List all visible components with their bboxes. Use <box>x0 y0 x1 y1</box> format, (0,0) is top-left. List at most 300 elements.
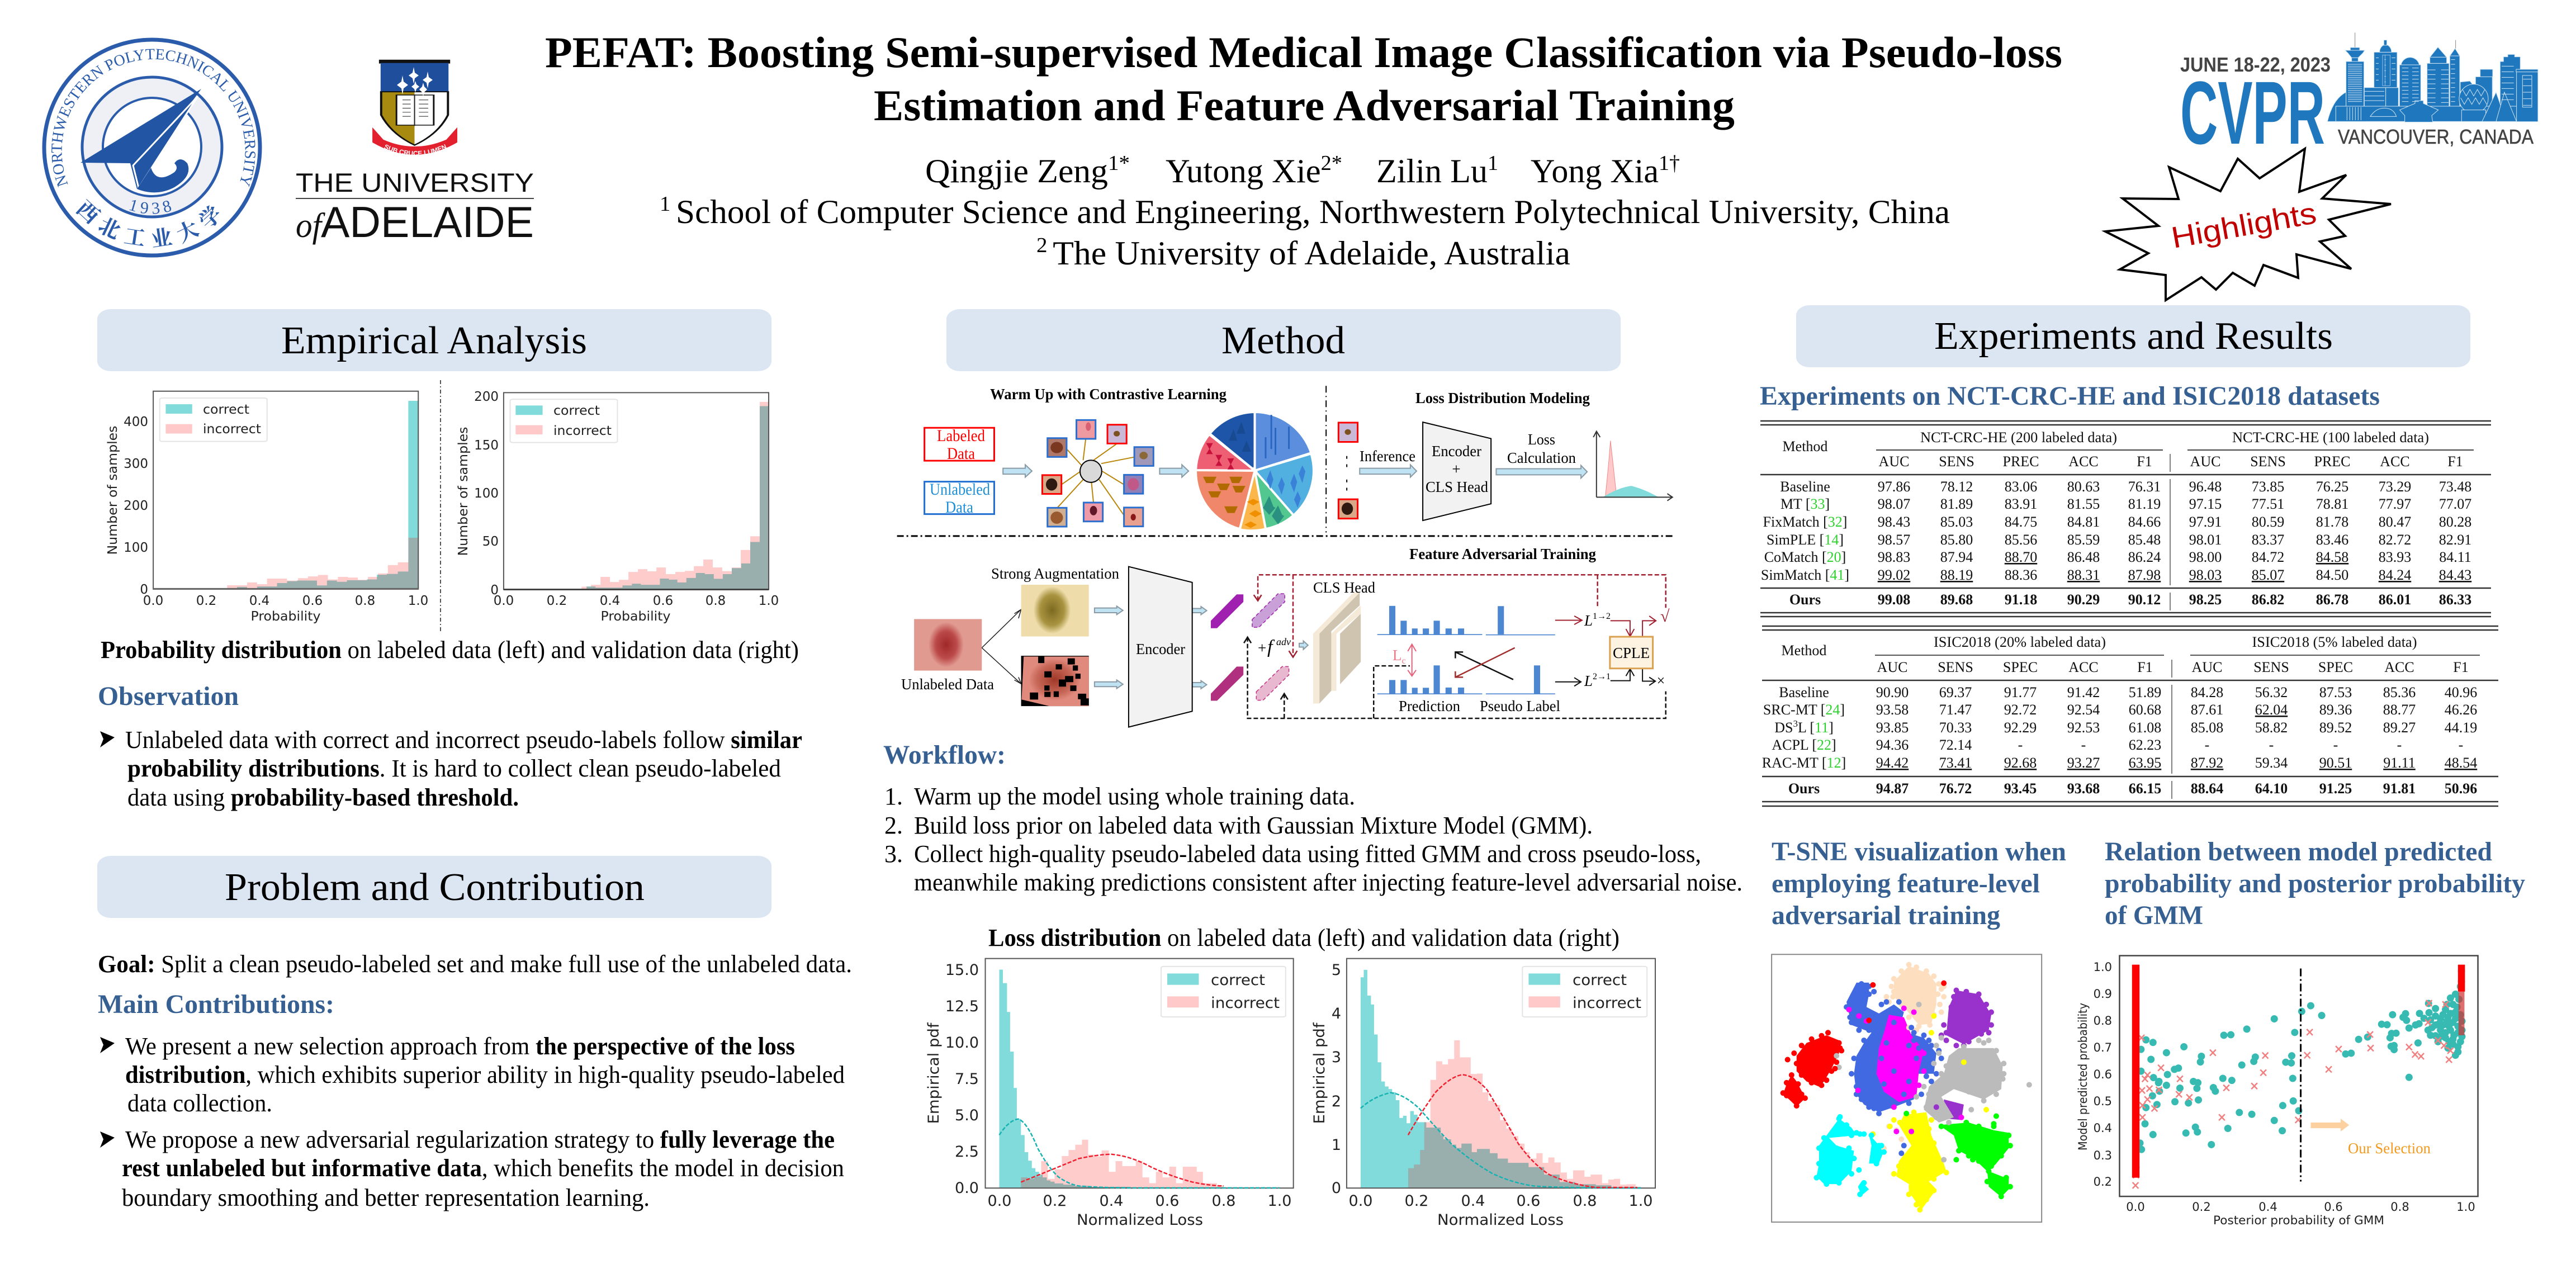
caption: probability distribution: Probability distribution on labeled data (left) and validation data (right) <box>101 636 799 664</box>
chart: loss distribution on labeled data: 7.5 <box>955 1071 979 1088</box>
table: NCT-CRC-HE results: 99.08 <box>1878 591 1910 608</box>
chart: loss distribution on labeled data: Normalized Loss <box>1077 1211 1203 1229</box>
table: ISIC2018 results: ISIC2018 (5% labeled data) <box>2252 634 2417 650</box>
logo: University of Adelaide: ADELAIDE <box>321 197 534 247</box>
chart: loss distribution on labeled data: 0.4 <box>1100 1192 1123 1210</box>
table: NCT-CRC-HE results: ACC <box>2068 453 2099 470</box>
table: NCT-CRC-HE results: 83.06 <box>2005 479 2037 495</box>
table: NCT-CRC-HE results: 86.24 <box>2128 549 2161 565</box>
table: ISIC2018 results: - <box>2269 737 2274 753</box>
table: NCT-CRC-HE results: F1 <box>2447 453 2463 470</box>
chart: probability distribution on labeled data <box>106 391 428 624</box>
authors and affiliations: Zilin Lu <box>1376 153 1487 190</box>
table: NCT-CRC-HE results: 83.37 <box>2252 532 2284 548</box>
method diagram labels: Loss Distribution Modeling <box>1415 390 1590 406</box>
prediction and pseudo-label bars <box>1377 606 1555 694</box>
mini loss distribution <box>1593 432 1673 501</box>
chart: probability distribution on validation data: Probability <box>600 609 671 624</box>
authors and affiliations: 2 <box>1036 234 1053 257</box>
chart: probability distribution on validation data: 0 <box>490 583 499 598</box>
table: ISIC2018 results: 87.53 <box>2319 684 2352 700</box>
table: NCT-CRC-HE results: 87.94 <box>1940 549 1973 565</box>
heading: T-SNE visualization: T-SNE visualization when <box>1772 837 2066 866</box>
heading: Experiments and Results: Experiments and Results <box>1934 315 2333 358</box>
table: ISIC2018 results: 93.45 <box>2004 780 2037 797</box>
table: ISIC2018 results: 93.68 <box>2067 780 2100 797</box>
table: NCT-CRC-HE results: 81.55 <box>2067 496 2100 512</box>
table: NCT-CRC-HE results: 82.91 <box>2439 532 2471 548</box>
table: NCT-CRC-HE results: 96.48 <box>2189 479 2222 495</box>
chart: model probability vs GMM posterior scatter <box>2076 956 2478 1227</box>
chart: model probability vs GMM posterior scatter: Posterior probability of GMM <box>2213 1214 2384 1227</box>
table: ISIC2018 results: 93.58 <box>1876 702 1909 718</box>
text block: workflow steps: 3. <box>884 840 903 868</box>
method diagram labels: + <box>1452 461 1461 477</box>
chart: loss distribution on labeled data: Empirical pdf <box>925 1022 943 1124</box>
heading: Empirical Analysis: Empirical Analysis <box>281 319 587 362</box>
table: NCT-CRC-HE results: 98.01 <box>2189 532 2222 548</box>
table: NCT-CRC-HE results: 77.97 <box>2379 496 2411 512</box>
chart: model probability vs GMM posterior scatter: 0.2 <box>2192 1200 2211 1214</box>
table: NCT-CRC-HE results: 81.89 <box>1940 496 1973 512</box>
dashed adversarial paths <box>1244 575 1666 718</box>
chart: probability distribution on labeled data: 0.0 <box>143 594 163 608</box>
heading: Main Contributions: Main Contributions: <box>98 989 334 1019</box>
logo: CVPR 2023 Vancouver: JUNE 18-22, 2023 <box>2180 53 2331 76</box>
chart: probability distribution on validation data: incorrect <box>553 424 612 438</box>
table: ISIC2018 results: SRC-MT [24] <box>1763 702 1845 718</box>
table: ISIC2018 results: 40.96 <box>2445 684 2477 700</box>
table: ISIC2018 results: 59.34 <box>2255 755 2288 771</box>
table: NCT-CRC-HE results: 88.36 <box>2005 567 2037 583</box>
chart: loss distribution on labeled data: 12.5 <box>945 998 979 1015</box>
table: NCT-CRC-HE results: 84.72 <box>2252 549 2284 565</box>
table: NCT-CRC-HE results: 73.29 <box>2379 479 2411 495</box>
table: ISIC2018 results: 56.32 <box>2255 684 2288 700</box>
heading: Experiments and Results <box>1796 305 2470 367</box>
table: NCT-CRC-HE results: Method <box>1783 438 1827 454</box>
heading: Empirical Analysis <box>97 309 771 371</box>
chart: model probability vs GMM posterior scatter: 0.8 <box>2390 1200 2409 1214</box>
chart: loss distribution on validation data <box>1311 959 1655 1229</box>
table: NCT-CRC-HE results: 98.57 <box>1878 532 1910 548</box>
chart: probability distribution on labeled data: 100 <box>124 541 148 555</box>
chart: loss distribution on validation data: 3 <box>1332 1049 1341 1066</box>
table: NCT-CRC-HE results: 97.15 <box>2189 496 2222 512</box>
chart: loss distribution on labeled data: 0.2 <box>1043 1192 1067 1210</box>
table: ISIC2018 results: 92.53 <box>2067 719 2100 736</box>
table: NCT-CRC-HE results: 91.18 <box>2005 591 2037 608</box>
method diagram labels: Feature Adversarial Training <box>1409 546 1596 562</box>
table: ISIC2018 results: ACPL [22] <box>1772 737 1836 753</box>
authors and affiliations: School of Computer Science and Engineering, Northwestern Polytechnical University, China <box>676 193 1950 230</box>
table: NCT-CRC-HE results <box>1760 421 2491 617</box>
table: NCT-CRC-HE results: NCT-CRC-HE (200 labeled data) <box>1920 429 2117 446</box>
table: NCT-CRC-HE results: 89.68 <box>1940 591 1973 608</box>
table: NCT-CRC-HE results: 98.07 <box>1878 496 1910 512</box>
chart: loss distribution on validation data: 0.6 <box>1517 1192 1540 1210</box>
text block: contributions: We propose a new adversarial regularization strategy to fully leverage the <box>125 1126 835 1153</box>
strong augmentation images <box>1021 585 1089 706</box>
table: ISIC2018 results: - <box>2018 737 2023 753</box>
method diagram labels: Strong Augmentation <box>991 565 1119 582</box>
chart: loss distribution on validation data: 0 <box>1332 1180 1341 1197</box>
heading: T-SNE visualization: adversarial training <box>1772 901 2000 930</box>
table: NCT-CRC-HE results: AUC <box>2190 453 2220 470</box>
heading: relation between probabilities: Relation between model predicted <box>2105 837 2492 866</box>
text block: workflow steps: 1. <box>884 783 903 810</box>
table: NCT-CRC-HE results: 83.93 <box>2379 549 2411 565</box>
table: NCT-CRC-HE results: 80.47 <box>2379 514 2411 530</box>
chart: probability distribution on labeled data: Probability <box>250 609 321 624</box>
method diagram labels: Prediction <box>1399 698 1460 714</box>
text block: observation: data using probability-based threshold. <box>127 784 519 811</box>
table: NCT-CRC-HE results: 97.91 <box>2189 514 2222 530</box>
chart: model probability vs GMM posterior scatter: Our Selection <box>2348 1140 2431 1157</box>
table: NCT-CRC-HE results: MT [33] <box>1781 496 1830 512</box>
table: NCT-CRC-HE results: 85.80 <box>1940 532 1973 548</box>
table: NCT-CRC-HE results: 84.58 <box>2316 549 2348 565</box>
heading: relation between probabilities <box>2105 837 2525 930</box>
table: NCT-CRC-HE results: 99.02 <box>1878 567 1910 583</box>
table: ISIC2018 results: 72.14 <box>1939 737 1972 753</box>
chart: loss distribution on validation data: Empirical pdf <box>1311 1022 1328 1124</box>
chart: loss distribution on validation data: correct <box>1573 972 1627 989</box>
chart: probability distribution on validation data: correct <box>553 404 600 418</box>
method diagram labels: CLS Head <box>1426 479 1488 495</box>
heading: experiments on datasets: Experiments on NCT-CRC-HE and ISIC2018 datasets <box>1760 381 2380 411</box>
table: NCT-CRC-HE results: 88.31 <box>2067 567 2100 583</box>
method diagram labels: Loss <box>1528 431 1555 448</box>
table: NCT-CRC-HE results: 80.63 <box>2067 479 2100 495</box>
table: ISIC2018 results: 63.95 <box>2129 755 2161 771</box>
chart: probability distribution on labeled data: 0 <box>140 583 148 597</box>
method diagram labels: Warm Up with Contrastive Learning <box>990 386 1227 402</box>
chart: loss distribution on labeled data: 2.5 <box>955 1143 979 1161</box>
table: ISIC2018 results: F1 <box>2137 659 2153 675</box>
encoder and CLS head trapezoid <box>1423 422 1491 520</box>
chart: loss distribution on validation data: incorrect <box>1573 995 1641 1012</box>
chart: model probability vs GMM posterior scatter: 1.0 <box>2456 1200 2475 1214</box>
logo: CVPR 2023 Vancouver: VANCOUVER, CANADA <box>2338 125 2534 148</box>
method diagram labels: L <box>1584 673 1593 689</box>
text block: workflow steps: meanwhile making predictions consistent after injecting feature-level adversarial noise. <box>914 869 1742 896</box>
chart: model probability vs GMM posterior scatter: Model predicted probability <box>2076 1003 2090 1150</box>
chart: probability distribution on labeled data: 0.4 <box>249 594 269 608</box>
callout: Highlights starburst <box>2105 149 2391 300</box>
sample thumbnails <box>1042 420 1358 527</box>
table: ISIC2018 results: 89.27 <box>2383 719 2416 736</box>
table: ISIC2018 results: - <box>2459 737 2463 753</box>
table: ISIC2018 results: 92.68 <box>2004 755 2037 771</box>
table: NCT-CRC-HE results: 85.03 <box>1940 514 1973 530</box>
table: NCT-CRC-HE results: 77.07 <box>2439 496 2471 512</box>
feature blocks <box>1211 594 1289 700</box>
table: ISIC2018 results: 76.72 <box>1939 780 1972 797</box>
table: ISIC2018 results: 3 <box>1793 718 1798 729</box>
chart: loss distribution on validation data: 0.8 <box>1573 1192 1597 1210</box>
table: ISIC2018 results: 92.72 <box>2004 702 2037 718</box>
table: NCT-CRC-HE results: 80.59 <box>2252 514 2284 530</box>
table: NCT-CRC-HE results: SimPLE [14] <box>1767 532 1844 548</box>
chart: loss distribution on validation data: 0.0 <box>1349 1192 1372 1210</box>
chart: probability distribution on validation data: 1.0 <box>759 594 779 608</box>
table: NCT-CRC-HE results: 86.33 <box>2439 591 2471 608</box>
logo: Northwestern Polytechnical University seal: 1938 <box>129 200 171 214</box>
table: NCT-CRC-HE results: 80.28 <box>2439 514 2471 530</box>
text block: contributions: rest unlabeled but informative data, which benefits the model in decision <box>122 1154 844 1182</box>
chart: model probability vs GMM posterior scatter: 1.0 <box>2094 960 2112 974</box>
method diagram labels: Encoder <box>1136 641 1185 657</box>
chart: probability distribution on validation data: 0.2 <box>547 594 567 608</box>
table: NCT-CRC-HE results: NCT-CRC-HE (100 labeled data) <box>2232 429 2429 446</box>
text block: workflow steps: 2. <box>884 812 903 839</box>
chart: loss distribution on validation data: Normalized Loss <box>1437 1211 1564 1229</box>
table: ISIC2018 results: ACC <box>2384 659 2414 675</box>
table: ISIC2018 results: 93.85 <box>1876 719 1909 736</box>
table: ISIC2018 results: 93.27 <box>2067 755 2100 771</box>
table: ISIC2018 results: SENS <box>1938 659 1973 675</box>
table: ISIC2018 results: Method <box>1782 642 1826 659</box>
authors and affiliations: 1 <box>660 192 676 216</box>
method diagram labels: 2→1 <box>1593 672 1611 681</box>
heading: Method <box>946 309 1621 371</box>
table: ISIC2018 results: 66.15 <box>2129 780 2161 797</box>
chart: probability distribution on validation data: 0.8 <box>705 594 726 608</box>
method diagram labels: CLS Head <box>1313 579 1375 596</box>
chart: probability distribution on labeled data: 0.2 <box>196 594 216 608</box>
table: NCT-CRC-HE results: 98.25 <box>2189 591 2222 608</box>
table: ISIC2018 results: 58.82 <box>2255 719 2288 736</box>
table: ISIC2018 results: 91.11 <box>2383 755 2416 771</box>
table: ISIC2018 results: 89.52 <box>2319 719 2352 736</box>
table: ISIC2018 results: 92.54 <box>2067 702 2100 718</box>
chart: probability distribution on validation data: Number of samples <box>456 427 471 556</box>
chart: loss distribution on labeled data: correct <box>1211 972 1265 989</box>
text block: contributions: We present a new selection approach from the perspective of the loss <box>125 1033 795 1060</box>
table: NCT-CRC-HE results: 88.70 <box>2005 549 2037 565</box>
table: NCT-CRC-HE results: 78.81 <box>2316 496 2348 512</box>
table: NCT-CRC-HE results: 73.48 <box>2439 479 2471 495</box>
method diagram labels: Inference <box>1360 448 1415 465</box>
method diagram labels: Unlabeled <box>930 480 990 499</box>
table: ISIC2018 results: 91.81 <box>2383 780 2416 797</box>
table: ISIC2018 results: 48.54 <box>2445 755 2477 771</box>
table: NCT-CRC-HE results: 81.19 <box>2128 496 2161 512</box>
authors and affiliations <box>660 151 1950 272</box>
chart: loss distribution on labeled data: 0.8 <box>1212 1192 1235 1210</box>
table: NCT-CRC-HE results: F1 <box>2137 453 2152 470</box>
table: NCT-CRC-HE results: 85.59 <box>2067 532 2100 548</box>
chart: probability distribution on labeled data: incorrect <box>203 422 261 437</box>
chart: loss distribution on labeled data: 0.0 <box>988 1192 1011 1210</box>
table: NCT-CRC-HE results: 84.11 <box>2439 549 2471 565</box>
logo: Northwestern Polytechnical University seal <box>42 38 262 257</box>
table: NCT-CRC-HE results: 90.29 <box>2067 591 2100 608</box>
text block: workflow steps: Build loss prior on labeled data with Gaussian Mixture Model (GMM). <box>914 812 1593 839</box>
table: NCT-CRC-HE results: AUC <box>1879 453 1909 470</box>
table: ISIC2018 results: 62.04 <box>2255 702 2288 718</box>
table: NCT-CRC-HE results: 81.78 <box>2316 514 2348 530</box>
table: ISIC2018 results: SENS <box>2253 659 2289 675</box>
chart: model probability vs GMM posterior scatter: 0.0 <box>2126 1200 2145 1214</box>
heading: relation between probabilities: of GMM <box>2105 901 2203 930</box>
text block: goal: Goal: Split a clean pseudo-labeled set and make full use of the unlabeled data. <box>98 950 852 978</box>
table: ISIC2018 results: AUC <box>1877 659 1907 675</box>
table: NCT-CRC-HE results: 84.50 <box>2316 567 2348 583</box>
chart: model probability vs GMM posterior scatter: 0.2 <box>2094 1175 2112 1188</box>
logo: Northwestern Polytechnical University seal: NORTHWESTERN POLYTECHNICAL UNIVERSITY <box>51 49 255 188</box>
chart: probability distribution on labeled data: 200 <box>124 499 148 513</box>
table: NCT-CRC-HE results: CoMatch [20] <box>1764 549 1846 565</box>
chart: loss distribution on labeled data <box>925 959 1294 1229</box>
table: NCT-CRC-HE results: 98.03 <box>2189 567 2222 583</box>
callout: Highlights starburst: Highlights <box>2169 196 2319 255</box>
table: ISIC2018 results: 91.25 <box>2319 780 2352 797</box>
table: ISIC2018 results: 94.36 <box>1876 737 1909 753</box>
authors and affiliations: The University of Adelaide, Australia <box>1053 235 1570 272</box>
table: NCT-CRC-HE results: SimMatch [41] <box>1761 567 1849 583</box>
table: NCT-CRC-HE results: PREC <box>2314 453 2351 470</box>
authors and affiliations: Yong Xia <box>1531 153 1659 190</box>
chart: probability distribution on labeled data: 300 <box>124 457 148 471</box>
logo: University of Adelaide <box>296 59 534 247</box>
method diagram labels: adv <box>1276 636 1291 647</box>
logo: CVPR 2023 Vancouver: CVPR <box>2180 63 2325 163</box>
chart: probability distribution on validation data: 150 <box>474 438 499 453</box>
heading: Observation: Observation <box>98 681 239 711</box>
chart: loss distribution on labeled data: 0.6 <box>1156 1192 1179 1210</box>
table: NCT-CRC-HE results: 98.00 <box>2189 549 2222 565</box>
table: ISIC2018 results: 51.89 <box>2129 684 2161 700</box>
authors and affiliations: 1* <box>1108 151 1130 175</box>
table: ISIC2018 results: 69.37 <box>1939 684 1972 700</box>
table: NCT-CRC-HE results: 84.24 <box>2379 567 2411 583</box>
chart: model probability vs GMM posterior scatter: 0.6 <box>2094 1068 2112 1081</box>
caption: loss distribution: Loss distribution on labeled data (left) and validation data (right) <box>988 924 1620 951</box>
table: ISIC2018 results: 87.92 <box>2191 755 2223 771</box>
table: NCT-CRC-HE results: 77.51 <box>2252 496 2284 512</box>
title <box>545 28 2062 130</box>
title: Estimation and Feature Adversarial Training <box>874 81 1735 130</box>
title: PEFAT: Boosting Semi-supervised Medical Image Classification via Pseudo-loss <box>545 28 2062 77</box>
heading: T-SNE visualization: employing feature-level <box>1772 869 2040 898</box>
table: ISIC2018 results: L [ <box>1798 719 1815 736</box>
branch arrows <box>982 609 1021 684</box>
chart: probability distribution on labeled data: Number of samples <box>106 426 120 555</box>
arrows: light blue flow arrows <box>1003 465 1587 689</box>
panel: labeled and unlabeled data boxes <box>925 428 994 514</box>
table: ISIC2018 results: 90.51 <box>2319 755 2352 771</box>
table: NCT-CRC-HE results: ACC <box>2380 453 2410 470</box>
text block: observation <box>100 726 802 811</box>
table: NCT-CRC-HE results: 90.12 <box>2128 591 2161 608</box>
table: ISIC2018 results: 62.23 <box>2129 737 2161 753</box>
chart: probability distribution on labeled data: correct <box>203 402 249 417</box>
table: NCT-CRC-HE results: SENS <box>2250 453 2286 470</box>
chart: probability distribution on validation data <box>456 390 779 624</box>
table: ISIC2018 results: 84.28 <box>2191 684 2223 700</box>
table: ISIC2018 results: 71.47 <box>1939 702 1972 718</box>
table: ISIC2018 results: DS <box>1774 719 1793 736</box>
method diagram labels: Unlabeled Data <box>901 676 994 693</box>
method diagram labels: 1→2 <box>1593 612 1611 621</box>
diagram: PEFAT method pipeline <box>897 386 1674 727</box>
CLS head layers <box>1313 593 1361 703</box>
table: ISIC2018 results: 94.42 <box>1876 755 1909 771</box>
chart: probability distribution on validation data: 50 <box>482 534 499 549</box>
table: ISIC2018 results: 89.36 <box>2319 702 2352 718</box>
table: ISIC2018 results: - <box>2333 737 2338 753</box>
table: ISIC2018 results: 73.41 <box>1939 755 1972 771</box>
table: ISIC2018 results: 91.77 <box>2004 684 2037 700</box>
table: NCT-CRC-HE results: 98.43 <box>1878 514 1910 530</box>
table: NCT-CRC-HE results: 84.81 <box>2067 514 2100 530</box>
table: ISIC2018 results: SPEC <box>2003 659 2038 675</box>
table: ISIC2018 results: 50.96 <box>2445 780 2477 797</box>
chart: T-SNE scatter clusters <box>1772 954 2042 1222</box>
heading: Workflow: Workflow: <box>883 740 1006 770</box>
table: NCT-CRC-HE results: 88.19 <box>1940 567 1973 583</box>
authors and affiliations: Yutong Xie <box>1166 153 1319 190</box>
table: NCT-CRC-HE results: 85.48 <box>2128 532 2161 548</box>
heading: T-SNE visualization <box>1772 837 2066 930</box>
logo: University of Adelaide: SUB CRUCE LUMEN <box>384 144 446 155</box>
table: NCT-CRC-HE results: SENS <box>1939 453 1974 470</box>
chart: loss distribution on validation data: 0.2 <box>1405 1192 1428 1210</box>
contrastive lines to center node <box>1057 439 1134 515</box>
table: ISIC2018 results: 44.19 <box>2445 719 2477 736</box>
lesions in thumbnails <box>1046 423 1353 524</box>
chart: model probability vs GMM posterior scatter: 0.8 <box>2094 1014 2112 1027</box>
table: NCT-CRC-HE results: 73.85 <box>2252 479 2284 495</box>
section dividers <box>897 386 1674 536</box>
chart: probability distribution on labeled data: 0.8 <box>355 594 375 608</box>
method diagram labels: √ <box>1660 607 1670 626</box>
logo: Northwestern Polytechnical University seal: 西北工业大学 <box>75 199 219 248</box>
table: ISIC2018 results: 90.90 <box>1876 684 1909 700</box>
heading: relation between probabilities: probability and posterior probability <box>2105 869 2525 898</box>
chart: loss distribution on validation data: 1.0 <box>1629 1192 1652 1210</box>
table: ISIC2018 results: - <box>2081 737 2086 753</box>
table: ISIC2018 results: 85.08 <box>2191 719 2223 736</box>
table: NCT-CRC-HE results: 84.43 <box>2439 567 2471 583</box>
table: ISIC2018 results: AUC <box>2192 659 2222 675</box>
chart: loss distribution on labeled data: 15.0 <box>945 962 979 979</box>
table: NCT-CRC-HE results: 86.82 <box>2252 591 2284 608</box>
logo: University of Adelaide: THE UNIVERSITY <box>296 168 534 197</box>
table: ISIC2018 results: 92.29 <box>2004 719 2037 736</box>
chart: loss distribution on labeled data: 0.0 <box>955 1180 979 1197</box>
table: NCT-CRC-HE results: 85.07 <box>2252 567 2284 583</box>
table: ISIC2018 results: F1 <box>2453 659 2469 675</box>
table: NCT-CRC-HE results: 78.12 <box>1940 479 1973 495</box>
method diagram labels: CPLE <box>1613 645 1650 661</box>
chart: loss distribution on labeled data: 1.0 <box>1268 1192 1291 1210</box>
table: NCT-CRC-HE results: 84.75 <box>2005 514 2037 530</box>
text block: contributions: distribution, which exhibits superior ability in high-quality pseudo-labeled <box>125 1061 845 1088</box>
table: NCT-CRC-HE results: 84.66 <box>2128 514 2161 530</box>
table: ISIC2018 results: 46.26 <box>2445 702 2477 718</box>
method diagram labels: Data <box>947 444 975 463</box>
chart: probability distribution on validation data: 0.6 <box>653 594 673 608</box>
method diagram labels: Labeled <box>937 427 985 445</box>
chart: probability distribution on labeled data: 0.6 <box>302 594 323 608</box>
table: NCT-CRC-HE results: 97.86 <box>1878 479 1910 495</box>
table: ISIC2018 results: - <box>2397 737 2402 753</box>
chart: loss distribution on validation data: 5 <box>1332 962 1341 979</box>
table: ISIC2018 results: 61.08 <box>2129 719 2161 736</box>
